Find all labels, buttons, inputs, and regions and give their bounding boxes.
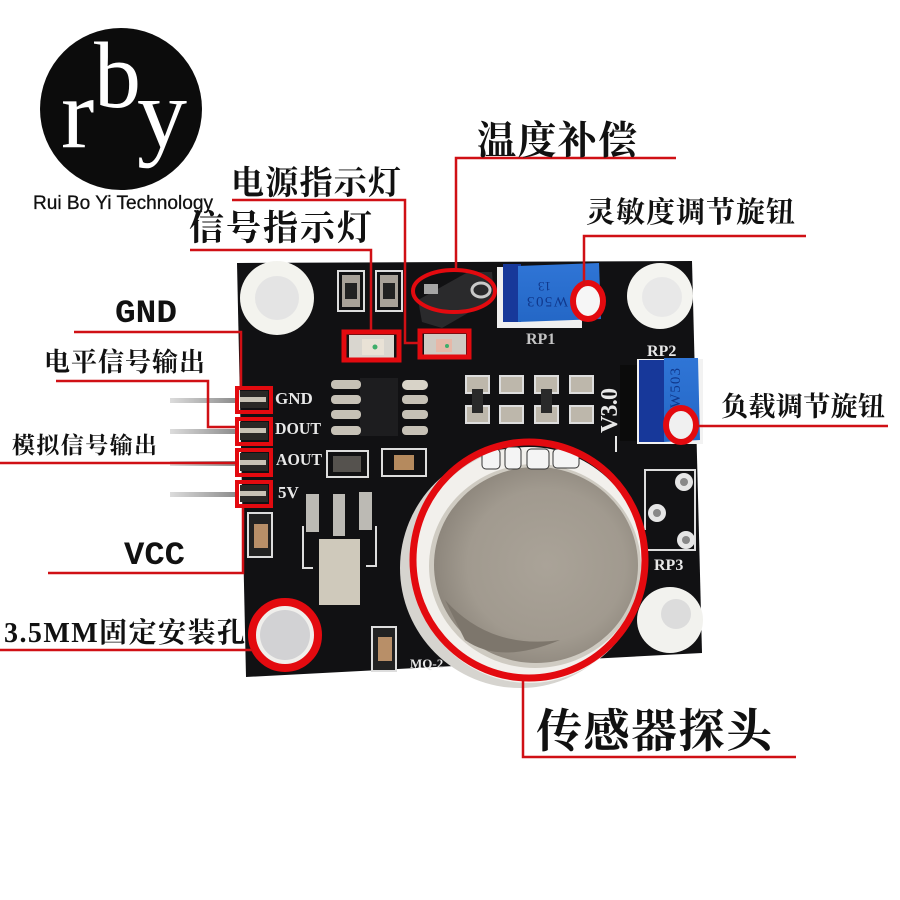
potentiometer RP2: W503 (668, 368, 684, 408)
potentiometer RP1: W503 (527, 293, 568, 309)
MQ label: MQ-2 (410, 656, 443, 671)
RP3 label: RP3 (654, 557, 683, 574)
pin pads in header boxes (240, 391, 268, 502)
bottom-left mounting hole (254, 604, 316, 666)
logo caption: Rui Bo Yi Technology (33, 193, 213, 214)
label: analog output: 模拟信号输出 (12, 433, 157, 458)
sensor probe (400, 447, 645, 688)
pin labels (275, 389, 323, 502)
RP1 label: RP1 (526, 331, 555, 348)
label: signal indicator: 信号指示灯 (189, 209, 372, 248)
logo: rby circle: y (137, 58, 187, 169)
sensor module board (237, 261, 703, 677)
temperature compensation jumper (418, 272, 494, 328)
label: power indicator: 电源指示灯 (231, 165, 401, 202)
logo: rby circle (40, 24, 202, 190)
version text: V3.0 (597, 388, 623, 433)
potentiometer RP1: 13 (538, 279, 551, 294)
copper pads (303, 492, 376, 605)
signal LED (349, 335, 394, 359)
SMD capacitors (248, 513, 396, 671)
pin labels: AOUT (276, 450, 323, 469)
pin labels: DOUT (275, 419, 322, 438)
label: sensor probe: 传感器探头 (536, 706, 776, 757)
logo: rby circle: b (94, 24, 141, 128)
logo: rby circle: r (61, 58, 94, 169)
header pins (170, 398, 238, 497)
RP3 footprint (645, 470, 695, 550)
label: sensitivity knob: 灵敏度调节旋钮 (586, 195, 795, 229)
IC chip (331, 378, 428, 436)
RP2 label: RP2 (647, 343, 676, 360)
label: load knob: 负载调节旋钮 (721, 392, 885, 422)
SMD parts mid (327, 449, 426, 477)
mounting hole right bottom (637, 587, 703, 653)
label: temperature compensation: 温度补偿 (477, 120, 639, 163)
pin labels: GND (275, 389, 313, 408)
SMD resistor array (466, 376, 593, 423)
mounting hole top left (240, 261, 314, 335)
pin labels: 5V (278, 483, 300, 502)
label: mounting hole: 3.5MM固定安装孔 (4, 617, 245, 649)
label: VCC: VCC (124, 537, 185, 574)
label: digital output: 电平信号输出 (44, 348, 205, 377)
mounting hole top right (627, 263, 693, 329)
SMD resistors top (338, 271, 402, 311)
potentiometer RP2 (620, 358, 703, 444)
leader lines (0, 158, 888, 757)
watermark blobs (482, 447, 579, 469)
potentiometer RP1 (497, 263, 601, 328)
red annotation markers (237, 270, 696, 678)
power LED (424, 334, 466, 356)
label: GND: GND (115, 295, 177, 332)
